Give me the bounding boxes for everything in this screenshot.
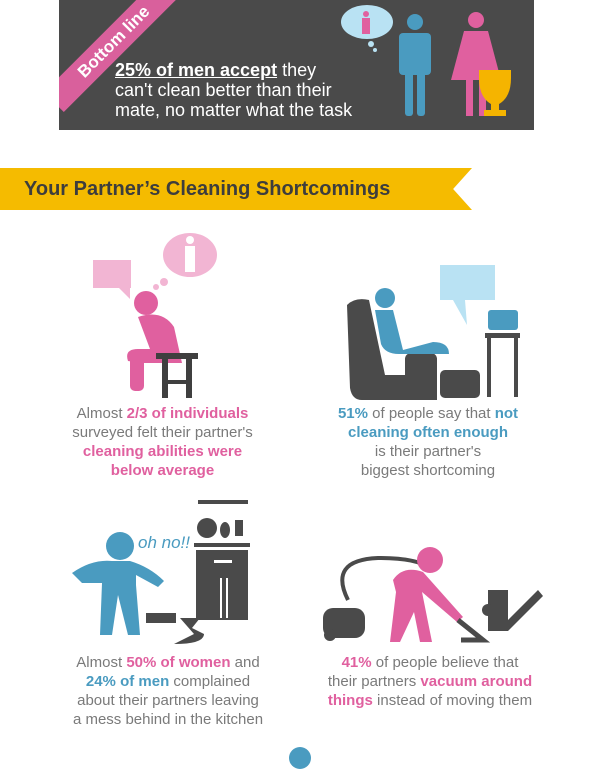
- text: 50% of women: a mess behind in the kitchen: [73, 711, 263, 728]
- icon: oh no kitchen: [72, 500, 250, 644]
- icon: man woman trophy: [341, 5, 511, 116]
- text: 41% of people: their partners vacuum around: [328, 673, 532, 690]
- icon: sad person on stool: [93, 233, 217, 398]
- text: 25% of men: 25% of men accept they: [115, 60, 316, 80]
- icon: person vacuuming: [323, 547, 543, 642]
- text: 51% of people: [338, 405, 518, 479]
- text: 2/3 of individuals: below average: [111, 462, 214, 479]
- title banner: [0, 168, 472, 210]
- text: 41% of people: [328, 654, 532, 709]
- icon: partial figure: [289, 747, 311, 769]
- text: 41% of people: 41% of people believe that: [342, 654, 518, 671]
- text: 25% of men: mate, no matter what the task: [115, 100, 352, 120]
- text: 50% of women: 24% of men complained: [86, 673, 250, 690]
- title banner: Your Partner’s Cleaning Shortcomings: [24, 178, 390, 200]
- text: 2/3 of individuals: Almost 2/3 of individuals: [77, 405, 248, 422]
- ribbon: bottom line: Bottom line: [74, 2, 153, 81]
- text: 2/3 of individuals: surveyed felt their partner's: [72, 424, 253, 441]
- text: 50% of women: [73, 654, 263, 728]
- ribbon: bottom line: [44, 0, 184, 112]
- text: 25% of men: can't clean better than their: [115, 80, 332, 100]
- panel: bottom line: [59, 0, 534, 130]
- text: 2/3 of individuals: [72, 405, 253, 479]
- icon: oh no kitchen: oh no!!: [138, 533, 190, 552]
- text: 51% of people: biggest shortcoming: [361, 462, 495, 479]
- text: 25% of men: [115, 60, 352, 120]
- text: 2/3 of individuals: cleaning abilities were: [83, 443, 242, 460]
- text: 51% of people: 51% of people say that not: [338, 405, 518, 422]
- text: 50% of women: Almost 50% of women and: [76, 654, 260, 671]
- text: 51% of people: is their partner's: [375, 443, 481, 460]
- icon: person in armchair with radio: [347, 265, 520, 400]
- text: 41% of people: things instead of moving them: [328, 692, 532, 709]
- text: 50% of women: about their partners leaving: [77, 692, 259, 709]
- text: 51% of people: cleaning often enough: [348, 424, 508, 441]
